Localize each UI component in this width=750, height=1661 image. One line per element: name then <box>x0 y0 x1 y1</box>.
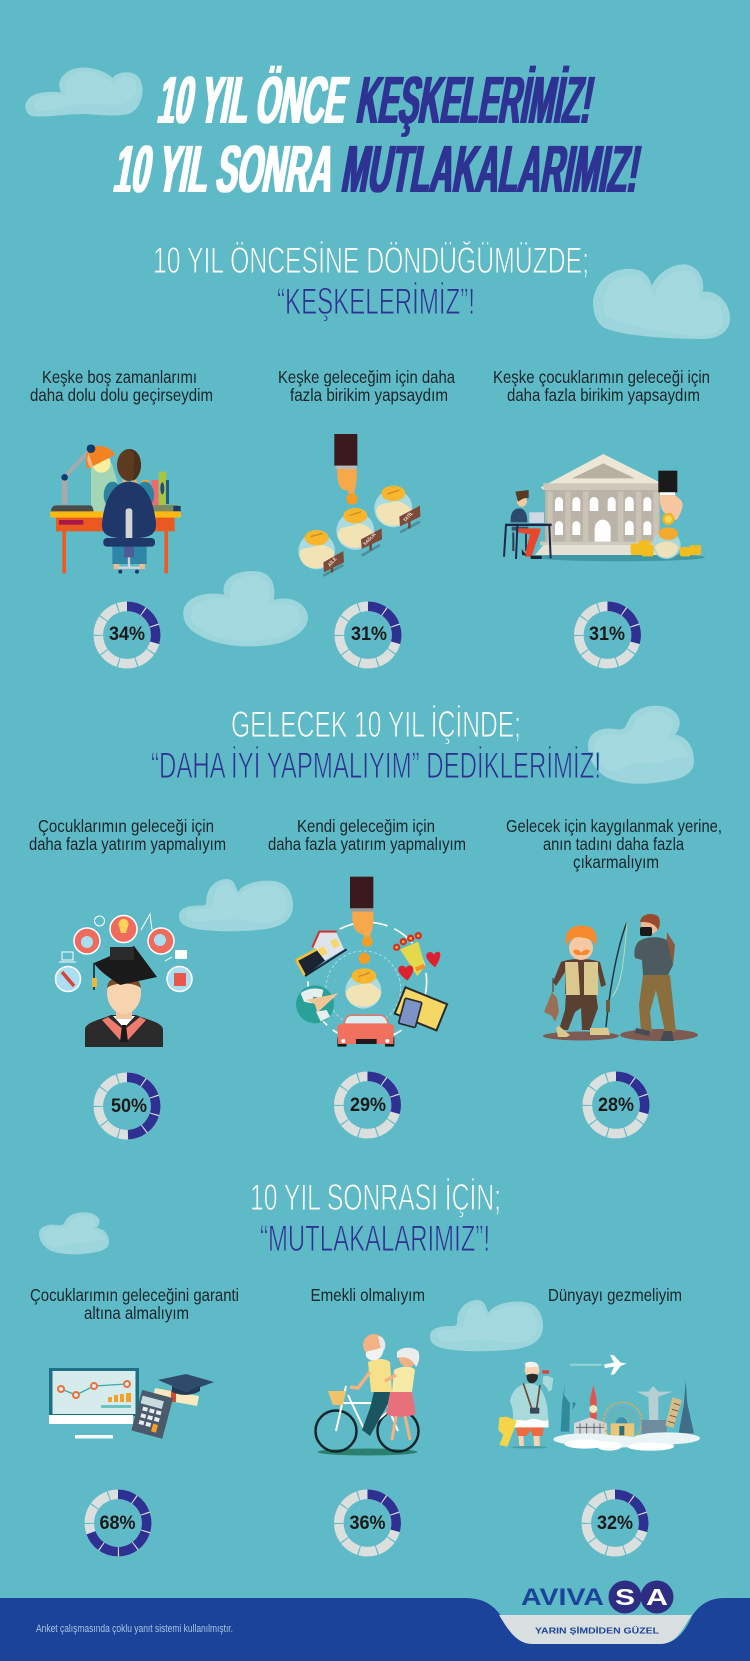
icon: hand and savings jars: TATİL <box>402 510 415 524</box>
question text: Keşke geleceğim için daha <box>278 367 455 387</box>
heading: gelecek 10 yıl: GELECEK 10 YIL İÇİNDE; <box>231 704 521 745</box>
question text: fazla birikim yapsaydım <box>290 385 448 405</box>
icon: hand and savings jars: AİLE <box>326 555 339 568</box>
panel: emekli <box>310 1285 425 1552</box>
question text: Çocuklarımın geleceğini garanti <box>30 1285 239 1305</box>
logo tagline plate <box>499 1615 692 1644</box>
icon: hand, jar and life goals circle <box>296 877 447 1047</box>
question text <box>268 816 466 854</box>
footnote: Anket çalışmasında çoklu yanıt sistemi kullanılmıştır. <box>36 1623 233 1635</box>
question text: Keşke boş zamanlarımı <box>42 367 197 387</box>
icon: hand and savings jars <box>298 434 420 576</box>
icon: person at desk <box>50 444 181 574</box>
cloud right of first heading <box>593 264 730 339</box>
question text <box>278 367 455 405</box>
donut: 31%: 31% <box>351 624 387 645</box>
panel: boş zaman <box>30 367 213 664</box>
donut: 68%: 68% <box>100 1513 136 1534</box>
question text: çıkarmalıyım <box>573 852 659 872</box>
question text <box>506 816 722 872</box>
question text: Emekli olmalıyım <box>310 1285 425 1305</box>
donut: 28% <box>587 1076 645 1134</box>
panel: garanti <box>30 1285 239 1552</box>
donut: 36% <box>339 1494 396 1552</box>
logo: AvivaSA: A <box>646 1584 668 1610</box>
icon: fisherman and photographer <box>543 914 698 1041</box>
donut: 29%: 29% <box>350 1095 386 1116</box>
main title: 10 YIL ÖNCE <box>153 63 353 138</box>
donut: 32% <box>586 1494 644 1552</box>
question text: anın tadını daha fazla <box>543 834 684 854</box>
question text: Keşke çocuklarımın geleceği için <box>493 367 710 387</box>
icon: monitor, calculator, diploma, cap <box>49 1368 214 1439</box>
cloud right of second heading <box>588 706 694 784</box>
question text: Çocuklarımın geleceği için <box>38 816 214 836</box>
donut: 31% <box>339 606 397 664</box>
donut: 50% <box>98 1077 156 1135</box>
icon: traveller and world landmarks <box>498 1355 700 1451</box>
question text <box>29 816 226 854</box>
cloud left of second jar illustration <box>179 879 293 931</box>
donut: 34% <box>98 606 156 664</box>
heading: 10 yıl öncesine <box>153 240 589 322</box>
panel: dünyayı gezmek <box>498 1285 700 1552</box>
icon: elderly couple on bicycle <box>316 1334 419 1456</box>
question text <box>30 367 213 405</box>
logo: AvivaSA: AVIVA <box>521 1584 604 1611</box>
cloud between first and second donut <box>183 571 308 646</box>
donut: 34%: 34% <box>109 624 145 645</box>
donut: 68% <box>89 1494 147 1552</box>
icon: hand and savings jars: SAĞLIK <box>362 531 378 546</box>
tagline: YARIN ŞİMDİDEN GÜZEL <box>535 1626 659 1636</box>
logo: AvivaSA <box>521 1580 674 1614</box>
heading: 10 yıl sonrası: 10 YIL SONRASI İÇİN; <box>250 1177 501 1218</box>
heading: 10 yıl sonrası: “MUTLAKALARIMIZ”! <box>260 1218 490 1259</box>
question text: altına almalıyım <box>84 1303 189 1323</box>
cloud left of third heading <box>39 1212 109 1254</box>
donut: 29% <box>339 1076 396 1134</box>
cloud top left <box>25 67 142 117</box>
heading: 10 yıl sonrası <box>250 1177 501 1259</box>
panel: çocuk yatırımı <box>29 816 226 1135</box>
footer band <box>0 1580 750 1661</box>
donut: 50%: 50% <box>111 1096 147 1117</box>
heading: gelecek 10 yıl <box>151 704 601 786</box>
main title <box>109 63 646 207</box>
cloud above travel illustration <box>430 1300 543 1351</box>
panel: anın tadı <box>506 816 722 1134</box>
question text: daha fazla birikim yapsaydım <box>507 385 700 405</box>
question text: daha fazla yatırım yapmalıyım <box>29 834 226 854</box>
donut: 32%: 32% <box>597 1513 633 1534</box>
donut: 28%: 28% <box>598 1095 634 1116</box>
main title: 10 YIL SONRA <box>109 132 340 207</box>
donut: 31%: 31% <box>589 624 625 645</box>
logo: AvivaSA: S <box>615 1584 635 1610</box>
donut: 31% <box>579 606 636 664</box>
panel: kendi yatırımı <box>268 816 466 1134</box>
heading: 10 yıl öncesine: “KEŞKELERİMİZ”! <box>277 281 475 322</box>
question text <box>493 367 710 405</box>
question text: daha dolu dolu geçirseydim <box>30 385 213 405</box>
question text: Dünyayı gezmeliyim <box>548 1285 682 1305</box>
icon: bank, man and hand <box>504 454 705 561</box>
question text: daha fazla yatırım yapmalıyım <box>268 834 466 854</box>
question text <box>30 1285 239 1323</box>
question text: Kendi geleceğim için <box>297 816 435 836</box>
donut: 36%: 36% <box>350 1513 386 1534</box>
icon: graduate with subject bubbles <box>56 914 192 1047</box>
panel: birikim <box>278 367 455 664</box>
panel: çocuklar için birikim <box>493 367 710 664</box>
